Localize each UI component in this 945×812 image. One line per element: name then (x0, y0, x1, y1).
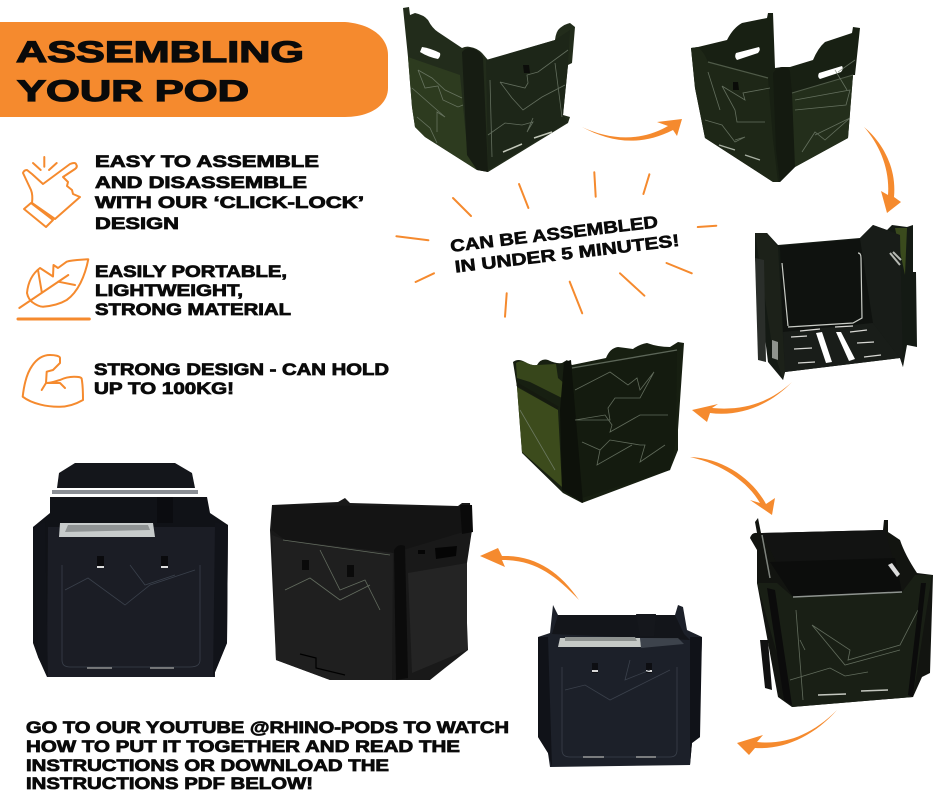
text: youtube instructions: GO TO OUR YOUTUBE @RHINO-PODS TO WATCH (26, 718, 509, 737)
icon: clicking hand (23, 157, 80, 227)
text: easily portable: EASILY PORTABLE, (95, 262, 287, 281)
text: strong design (94, 360, 389, 398)
icon: flexed arm (23, 355, 83, 407)
text: youtube instructions: HOW TO PUT IT TOGETHER AND READ THE (26, 737, 460, 756)
title banner: YOUR POD (17, 75, 249, 108)
pod step 6 (538, 605, 702, 767)
text: youtube instructions: INSTRUCTIONS PDF BELOW! (26, 774, 313, 793)
text: strong design: UP TO 100KG! (94, 379, 234, 398)
callout: under 5 minutes: CAN BE ASSEMBLED (449, 212, 659, 256)
callout burst rays (396, 172, 716, 317)
text: easily portable: LIGHTWEIGHT, (95, 281, 243, 300)
pod step 3 (755, 225, 917, 380)
text: easy to assemble: DESIGN (95, 214, 179, 233)
text: youtube instructions (26, 718, 509, 793)
callout: under 5 minutes (449, 210, 680, 277)
title banner: ASSEMBLING (16, 36, 304, 69)
title banner (0, 22, 388, 117)
arrow: step 6 to finished pods (480, 548, 579, 600)
pod step 5 (750, 518, 933, 707)
arrow: step 2 to step 3 (864, 127, 901, 213)
arrow: step 3 to step 4 (692, 382, 792, 422)
text: easily portable: STRONG MATERIAL (95, 300, 291, 319)
text: youtube instructions: INSTRUCTIONS OR DOWNLOAD THE (26, 756, 389, 775)
text: easy to assemble (95, 152, 364, 233)
text: easily portable (95, 262, 291, 319)
arrow: step 4 to step 5 (690, 457, 775, 515)
text: easy to assemble: AND DISASSEMBLE (95, 173, 307, 192)
finished pod: front view (33, 463, 228, 677)
arrow: step 1 to step 2 (582, 119, 682, 141)
text: strong design: STRONG DESIGN - CAN HOLD (94, 360, 389, 379)
icon: leaf (18, 259, 89, 319)
pod step 4 (513, 342, 684, 503)
arrow: step 5 to step 6 (737, 710, 837, 755)
finished pod: angled view (270, 498, 473, 680)
text: easy to assemble: WITH OUR ‘CLICK-LOCK’ (95, 193, 364, 212)
pod step 2 (691, 13, 860, 182)
pod step 1 (403, 7, 575, 172)
text: easy to assemble: EASY TO ASSEMBLE (95, 152, 319, 171)
callout: under 5 minutes: IN UNDER 5 MINUTES! (454, 231, 680, 277)
